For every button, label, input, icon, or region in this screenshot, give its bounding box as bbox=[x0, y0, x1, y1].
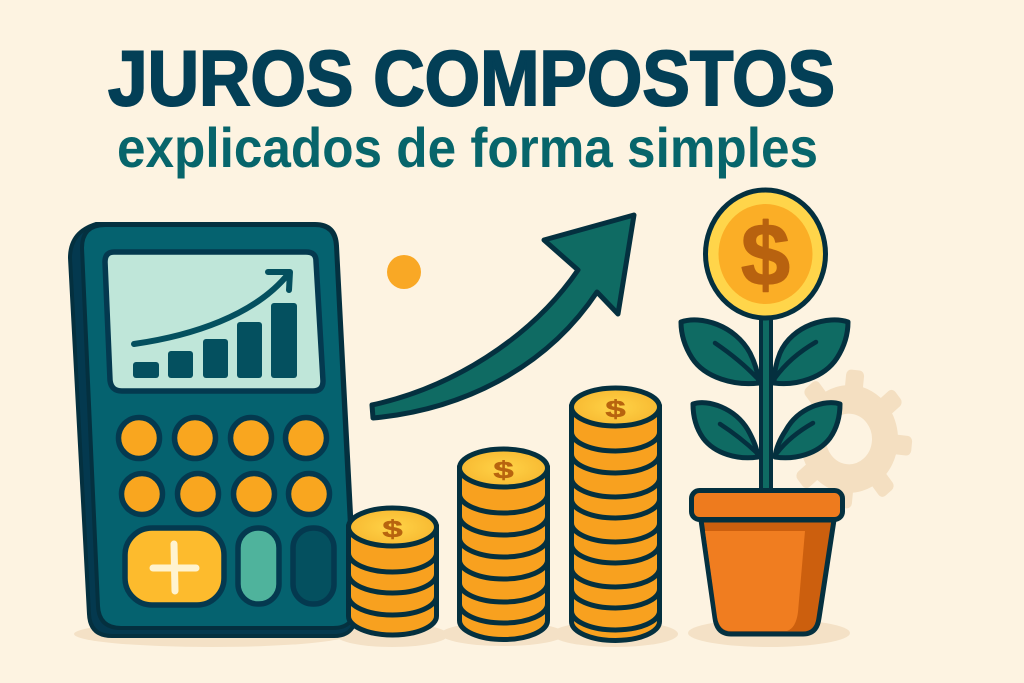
coin flower bbox=[706, 190, 826, 318]
subtitle: explicados de forma simples bbox=[117, 116, 818, 179]
dollar sign: $ bbox=[382, 515, 403, 542]
calculator screen bbox=[105, 252, 323, 391]
leaf veins bbox=[715, 342, 816, 453]
flower pot bbox=[692, 490, 842, 634]
coin stack medium bbox=[460, 449, 548, 640]
icon: orange dot bbox=[387, 255, 421, 289]
coin stack large bbox=[572, 388, 660, 640]
leaves bbox=[681, 320, 848, 458]
growth arrow bbox=[372, 215, 634, 418]
money plant bbox=[681, 190, 848, 634]
calculator back edge bbox=[70, 224, 356, 636]
coin flower dollar sign: $ bbox=[741, 205, 790, 304]
coin stack small bbox=[348, 508, 436, 635]
calculator bbox=[70, 224, 356, 636]
dark pill button bbox=[293, 528, 334, 604]
dollar sign: $ bbox=[493, 456, 514, 483]
plant stem bbox=[761, 318, 771, 492]
screen bar chart bbox=[133, 303, 297, 378]
screen trend arrow bbox=[134, 272, 290, 344]
ground shadows bbox=[74, 619, 850, 647]
calculator body bbox=[82, 225, 354, 628]
dollar sign: $ bbox=[605, 395, 626, 422]
calculator round buttons bbox=[118, 418, 330, 514]
plus button bbox=[125, 528, 224, 605]
title: JUROS COMPOSTOS bbox=[108, 34, 835, 122]
icon: background gear bbox=[780, 363, 918, 515]
green pill button bbox=[238, 528, 279, 604]
